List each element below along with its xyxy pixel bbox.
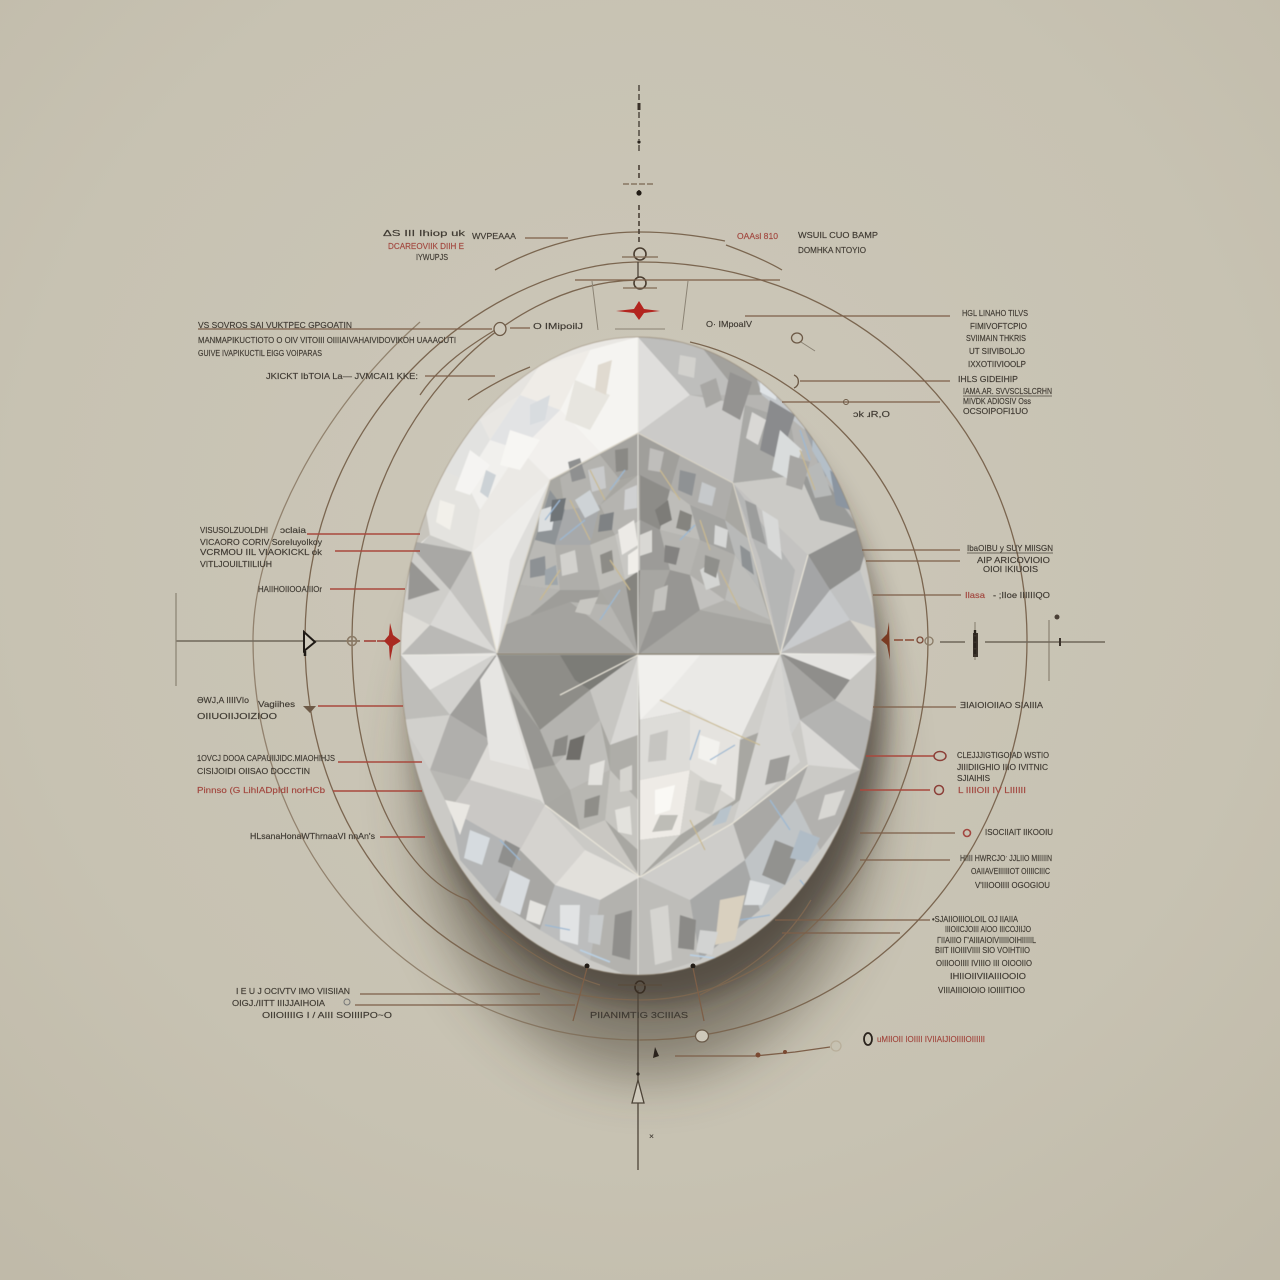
lower crown facets bbox=[430, 655, 860, 980]
label: bottom center: PIIANIMTIG 3CIIIAS bbox=[590, 1010, 688, 1020]
label: left block A: VCRMOU IIL VIAOKICKL ok bbox=[200, 547, 323, 557]
label: right mid G: V'IIIOOIIII OGOGIOU bbox=[975, 880, 1050, 890]
top marker: circle bbox=[622, 248, 658, 260]
label: left block B: HAIIHOIIOOAIIIOr bbox=[258, 584, 322, 594]
label: left block D: 1OVCJ DOOA CAPAUIIJIDC.MIAOHIHJS bbox=[197, 753, 335, 763]
label: right ring block bbox=[782, 374, 1052, 419]
bottom markers below the diamond bbox=[573, 964, 704, 1021]
label: upper right line block: UT SIIVIBOLJO bbox=[969, 346, 1025, 356]
label: top right: OAAsl 810 bbox=[737, 231, 778, 241]
diamond drop shadow bbox=[418, 385, 886, 1075]
label: upper left with circle bbox=[198, 320, 583, 358]
bottom arrow: × bbox=[649, 1131, 654, 1141]
table: upper shards bbox=[497, 433, 780, 655]
diamond bbox=[395, 330, 885, 980]
label: left block D bbox=[197, 753, 422, 776]
label: right ring block: IHLS GIDEIHIP bbox=[958, 374, 1018, 384]
label: right ring block: OCSOIPOFI1UO bbox=[963, 406, 1028, 416]
label: left block A: VITLJOUILTIILIUH bbox=[200, 559, 272, 569]
label: top right bbox=[737, 230, 878, 255]
label: right tick bbox=[974, 630, 976, 654]
label: lower right stack: VIIIAIIIOIOIO IOIIIITIOO bbox=[938, 985, 1025, 995]
left target marker bbox=[346, 636, 360, 646]
fan: left bbox=[400, 540, 497, 780]
label: right mid E red ring: L IIIIOII IV LIIIIII bbox=[958, 785, 1026, 795]
label: upper left with circle: O IMipoilJ bbox=[533, 321, 583, 331]
label: lower right stack: IHIIOIIVIIAIIIOOIO bbox=[950, 971, 1026, 981]
label: left block C: OIIUOIIJOIZIOO bbox=[197, 711, 277, 721]
label: left block C bbox=[197, 695, 403, 721]
label: right mid B: Ilasa bbox=[965, 590, 985, 600]
label: left block A: VISUSOLZUOLDHI bbox=[200, 525, 268, 535]
concentric orbit rings bbox=[253, 232, 1027, 1040]
label: top left: DCAREOVIIK DIIH E bbox=[388, 241, 464, 251]
label: left block A: ɔclaia bbox=[280, 525, 306, 535]
crown: upper kites bbox=[472, 480, 808, 653]
label: left block C: Vagiihes bbox=[258, 699, 295, 709]
label: right mid D red ring bbox=[866, 750, 1049, 783]
label: upper left second: JKICKT IbTOIA La— JVMCAI1 KKE: bbox=[266, 371, 418, 381]
crown: upper right facets bbox=[638, 338, 857, 530]
label: left block F: HLsanaHonaWThrnaaVI nnAn's bbox=[250, 831, 375, 841]
label: upper left with circle: GUIVE IVAPIKUCTIL EIGG VOIPARAS bbox=[198, 348, 322, 358]
label: upper right line block: HGL LINAHO TILVS bbox=[962, 308, 1028, 318]
label: bottom left: OIIOIIIIG I / AIII SOIIIIPO~O bbox=[262, 1010, 392, 1020]
label: left block D: CISIJOIDI OIISAO DOCCTIN bbox=[197, 766, 310, 776]
label: right mid F: ISOCIIAIT IIKOOIU bbox=[985, 827, 1053, 837]
label: left block A bbox=[200, 525, 420, 569]
label: right mid E red ring bbox=[860, 785, 1026, 795]
left arrow marker bbox=[304, 632, 315, 656]
label: left block A: VICAORO CORIV SoreIuyoIkoy bbox=[200, 537, 323, 547]
label: left block E red: Pinnso (G LihIADpIdI norHCb bbox=[197, 785, 325, 795]
label: lower right stack: ΓIIAIIIO Γ'AIIIAIOIVIIIIIOIHIIIIIL bbox=[937, 935, 1036, 945]
label: upper right line block: IXXOTIIVIOOLP bbox=[968, 359, 1026, 369]
label: right mid C: ƎIAIOIOIIAO SIAIIIA bbox=[960, 700, 1043, 710]
top marker: red star bbox=[616, 301, 660, 320]
label: right mid D red ring: CLEJJJIGTIGOIAD WSTIO bbox=[957, 750, 1049, 760]
facet edges and spectral glints bbox=[401, 430, 876, 975]
vertical axis bbox=[623, 85, 655, 1170]
label: upper right line block: SVIIMAIN THKRIS bbox=[966, 333, 1026, 343]
label: bottom right with callout chain bbox=[653, 1030, 985, 1058]
label: right mid G: HIIII HWRCJOˑ JJLIIO MIIIIIN bbox=[960, 853, 1052, 863]
label: top left: IYWUPJS bbox=[416, 252, 448, 262]
label: bottom left: I E U J OCIVTV IMO VIISIIAN bbox=[236, 986, 350, 996]
label: right mid G: OAIIAVEIIIIIIOT OIIIICIIIC bbox=[971, 866, 1050, 876]
horizontal axis bbox=[176, 593, 1105, 686]
label: top right: WSUIL CUO BAMP bbox=[798, 230, 878, 240]
label: right ring block: MIVDK ADIOSIV Oss bbox=[963, 396, 1031, 406]
label: lower right stack: •SJAIIOIIIOLOIL OJ IIAIIA bbox=[932, 914, 1018, 924]
label: lower right stack: OIIIOOIIII IVIIIO III OIOOIIO bbox=[936, 958, 1032, 968]
label: top left bbox=[383, 228, 568, 262]
label: upper right line block: O· IMpoaIV bbox=[706, 319, 752, 329]
label: right mid A: IbaOIBU y SUY MIISGN bbox=[967, 543, 1053, 553]
table: base bbox=[497, 433, 780, 877]
label: bottom left: OIGJ./IITT IIIJJAIHOIA bbox=[232, 998, 325, 1008]
label: right mid F bbox=[860, 827, 1053, 837]
label: right mid A: OIOI IKIUOIS bbox=[983, 564, 1038, 574]
crown: upper left bright facets bbox=[418, 336, 638, 552]
label: right ring block: IAMA.AR. SVVSCLSLCRHN bbox=[963, 386, 1052, 396]
label: right mid A bbox=[862, 543, 1053, 574]
right red arrow marker bbox=[881, 622, 933, 660]
label: lower right stack: IIIOIICJOIII AIOO IIICOJIIJO bbox=[945, 924, 1031, 934]
label: upper left with circle: MANMAPIKUCTIOTO O OIV VITOIII OIIIIAIVAHAIVIDOVIKOH UAAACUTI bbox=[198, 335, 456, 345]
fan: right bbox=[780, 530, 876, 770]
label: top left: ΔS III Ihiop uk bbox=[383, 228, 466, 238]
label: top right: DOMHKA NTOYIO bbox=[798, 245, 866, 255]
label: right mid G bbox=[860, 853, 1052, 890]
label: right mid B bbox=[873, 590, 1050, 600]
label: lower right stack: BIIT IIOIIIVIIII SIO VOIHTIIO bbox=[935, 945, 1030, 955]
table: lower shards bbox=[497, 655, 780, 877]
label: upper right line block: FIMIVOFTCPIO bbox=[970, 321, 1027, 331]
label: upper left with circle: VS SOVROS SAI VUKTPEC GPGOATIN bbox=[198, 320, 352, 330]
label: top left: WVPEAAA bbox=[472, 231, 516, 241]
label: bottom left bbox=[232, 986, 575, 1020]
table: fine chips bbox=[618, 520, 638, 555]
label: right mid D red ring: SJIAIHIS bbox=[957, 773, 990, 783]
label: lower right stack bbox=[775, 914, 1036, 995]
left red arrow marker bbox=[364, 623, 401, 661]
label: right mid B: - ;IIoe IIIIIIQO bbox=[993, 590, 1050, 600]
label: right mid D red ring: JIIIDIIGHIO IIIO IVITNIC bbox=[957, 762, 1048, 772]
top marker: circle lower bbox=[623, 277, 657, 289]
bottom arrow bbox=[632, 1072, 654, 1141]
label: upper right line block bbox=[706, 308, 1028, 369]
horizontal bracket above diamond bbox=[575, 280, 780, 330]
label: bottom right with callout chain: uMIIOII IOIIII IVIIAIJIOIIIIOIIIIII bbox=[877, 1034, 985, 1044]
label: right mid A: AIP ARICOVIOIO bbox=[977, 555, 1050, 565]
label: right ring block: ɔk ɹR,O bbox=[853, 409, 890, 419]
label: left block C: ƏWJ,A IIIIVIo bbox=[197, 695, 249, 705]
